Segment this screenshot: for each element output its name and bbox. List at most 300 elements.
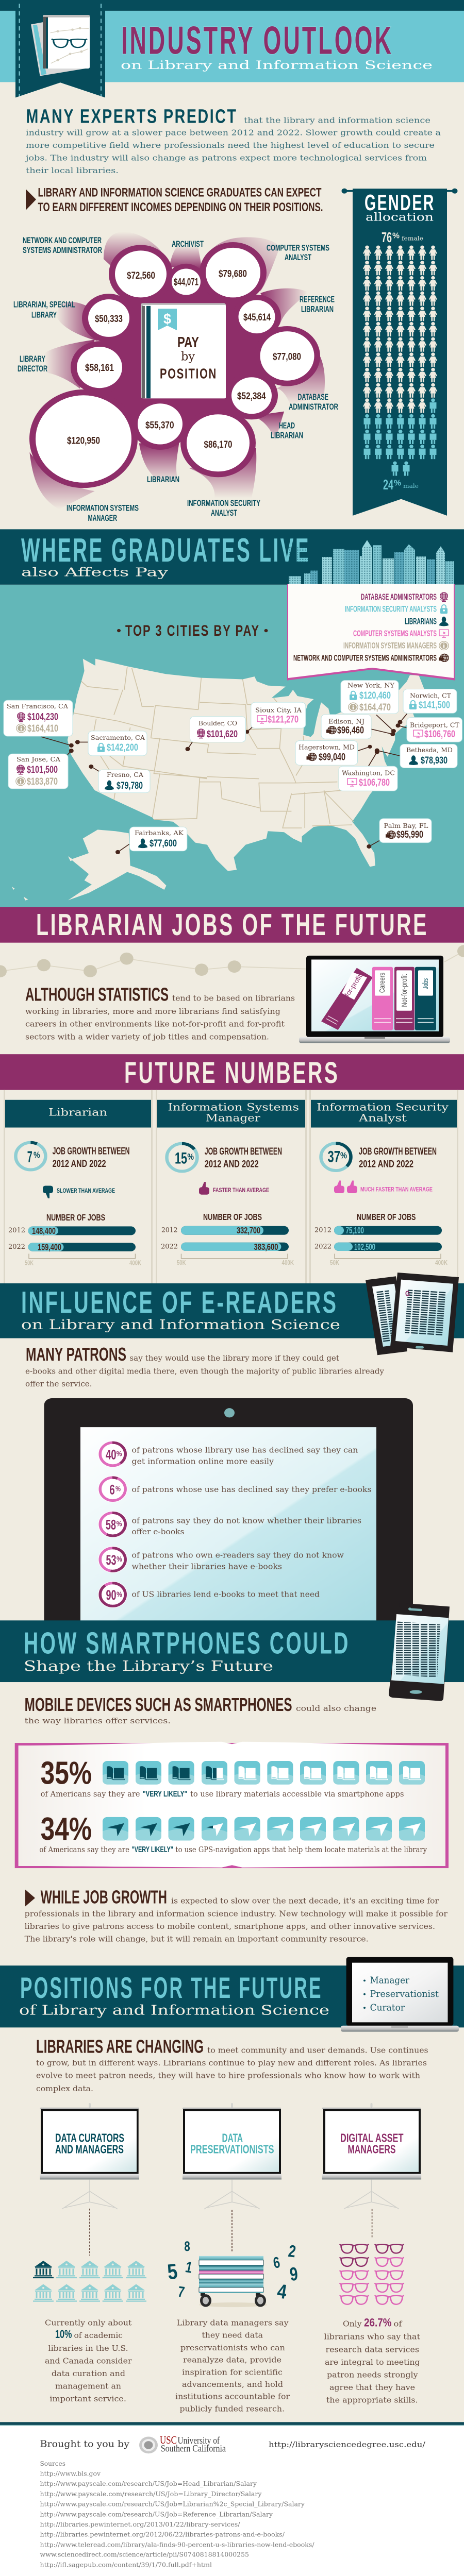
column: Information Systems Manager bbox=[157, 1100, 305, 1266]
icon: book cart with numbers: 1 bbox=[184, 2258, 194, 2276]
24 percent male: male bbox=[403, 483, 419, 489]
text: data preservationists: they need data bbox=[202, 2331, 263, 2340]
many patrons paragraph: MANY PATRONS bbox=[26, 1344, 126, 1365]
callout: Bethesda bbox=[400, 744, 457, 768]
salary circles: $44,071 bbox=[174, 277, 198, 287]
bar chart: systems manager jobs: 2022 bbox=[161, 1243, 178, 1250]
callout: San Jose: San Jose, CA bbox=[16, 756, 61, 764]
text: digital asset managers bbox=[324, 2316, 421, 2404]
position labels: COMPUTER SYSTEMS bbox=[267, 243, 329, 252]
position labels: ADMINISTRATOR bbox=[289, 402, 338, 412]
text: data curators: important service. bbox=[49, 2395, 126, 2403]
text: data preservationists: institutions accountable for bbox=[175, 2392, 290, 2401]
76 percent female: female bbox=[402, 235, 423, 242]
column: Information Systems Manager: FASTER THAN AVERAGE bbox=[213, 1187, 269, 1194]
salary circles: $58,161 bbox=[85, 363, 114, 374]
text: data curators: and Canada consider bbox=[45, 2357, 132, 2365]
stat: 58 percent bbox=[98, 1511, 361, 1538]
top 3 cities heading bbox=[117, 621, 268, 639]
salary circles: $79,680 bbox=[219, 268, 247, 279]
arrow and pay heading: LIBRARY AND INFORMATION SCIENCE GRADUATES CAN EXPECT bbox=[38, 186, 322, 199]
24 percent male bbox=[383, 477, 419, 493]
stat: 53 percent: 53 bbox=[106, 1552, 116, 1568]
stat: 40 percent: of patrons whose library use has declined say they can bbox=[132, 1446, 358, 1454]
position labels: LIBRARIAN bbox=[147, 474, 179, 484]
icon: book cart with numbers: 9 bbox=[289, 2263, 299, 2285]
future numbers banner bbox=[0, 1054, 464, 1090]
callout: San Francisco: $104,230 bbox=[27, 712, 58, 722]
leader lines and city dots bbox=[41, 714, 407, 854]
stat: 35 percent smartphone apps: 35% bbox=[41, 1755, 92, 1791]
sources list: http://www.payscale.com/research/US/Job=Reference_Librarian/Salary bbox=[40, 2511, 273, 2518]
position labels: LIBRARIAN, SPECIAL bbox=[13, 299, 75, 309]
callout: Fresno bbox=[98, 770, 150, 793]
positions for the future banner: of Library and Information Science bbox=[19, 2003, 329, 2018]
intro paragraph: their local libraries. bbox=[26, 166, 119, 175]
callout: Bridgeport: Bridgeport, CT bbox=[410, 722, 459, 729]
callout: San Francisco bbox=[4, 700, 73, 736]
callout: Fairbanks bbox=[129, 827, 187, 851]
position labels: ANALYST bbox=[211, 508, 237, 518]
callout: New York: $164,470 bbox=[359, 702, 391, 713]
stat: 40 percent: 40 bbox=[106, 1447, 117, 1462]
donut: 7 percent bbox=[15, 1143, 45, 1170]
text: data curators: data curation and bbox=[52, 2369, 125, 2378]
intro paragraph: industry will grow at a slower pace between 2012 and 2022. Slower growth could create a bbox=[26, 128, 441, 137]
where graduates live banner: also Affects Pay bbox=[21, 565, 168, 579]
stat: 58 percent: offer e-books bbox=[132, 1528, 185, 1536]
although statistics paragraph: tend to be based on librarians bbox=[172, 994, 295, 1003]
text: digital asset managers: Only bbox=[343, 2319, 362, 2328]
callout: Palm Bay: Palm Bay, FL bbox=[384, 823, 428, 830]
open book statistics panel bbox=[15, 1742, 449, 1868]
bar chart: systems manager jobs: 50K bbox=[177, 1259, 186, 1266]
text: data preservationists: Library data managers say bbox=[177, 2318, 289, 2327]
24 percent male: 24 bbox=[383, 477, 393, 493]
sources list: http://www.bls.gov bbox=[40, 2470, 101, 2478]
pay by position book: $ bbox=[163, 312, 171, 327]
stat: 90 percent: 90 bbox=[106, 1587, 116, 1603]
projector screen: data preservationists: DATA bbox=[222, 2132, 243, 2145]
thumb up bbox=[199, 1182, 209, 1195]
laptop with position list: Curator bbox=[370, 2003, 405, 2013]
donut: 37 percent bbox=[321, 1143, 351, 1171]
city skyline bbox=[289, 540, 454, 585]
header banner bbox=[0, 0, 464, 97]
laptop with binders bbox=[299, 956, 450, 1043]
callout: Palm Bay bbox=[379, 819, 432, 843]
column: Information Systems Manager: NUMBER OF JOBS bbox=[203, 1212, 262, 1222]
legend panel bbox=[287, 584, 455, 681]
city callouts bbox=[4, 681, 462, 851]
stat: 90 percent: of US libraries lend e-books to meet that need bbox=[132, 1590, 320, 1599]
many patrons paragraph: offer the service. bbox=[25, 1380, 92, 1388]
donut: 15 percent bbox=[167, 1144, 197, 1171]
text: digital asset managers: patron needs strongly bbox=[327, 2370, 418, 2379]
bar chart: security analyst jobs: 400K bbox=[435, 1259, 448, 1266]
pay by position book bbox=[141, 303, 226, 398]
position labels: NETWORK AND COMPUTER bbox=[23, 235, 102, 245]
donut: 7 percent: % bbox=[34, 1150, 40, 1160]
e-reader tablets icon: G bbox=[405, 1290, 410, 1298]
position labels: HEAD bbox=[279, 420, 295, 430]
bar chart: systems manager jobs bbox=[161, 1226, 294, 1266]
brought to you by: http://librarysciencedegree.usc.edu/ bbox=[269, 2441, 425, 2449]
bar chart: librarian jobs: 159,400 bbox=[38, 1242, 61, 1252]
callout: Hagerstown: $99,040 bbox=[319, 752, 345, 762]
intro paragraph bbox=[25, 105, 441, 175]
stat: 58 percent: of patrons say they do not know whether their libraries bbox=[132, 1516, 361, 1526]
stat: 34 percent GPS apps bbox=[40, 1817, 427, 1854]
bar chart: security analyst jobs: 2012 bbox=[314, 1227, 332, 1234]
salary circles: $55,370 bbox=[145, 420, 174, 431]
libraries are changing paragraph: to meet community and user demands. Use continues bbox=[207, 2046, 428, 2055]
salary circles: $52,384 bbox=[237, 391, 266, 402]
callout: Fresno: $79,780 bbox=[117, 781, 143, 791]
many patrons paragraph: e-books and other digital media there, even though the majority of public libraries already bbox=[25, 1367, 384, 1376]
projector screen: data preservationists: PRESERVATIONISTS bbox=[190, 2143, 274, 2156]
callout: Edison: Edison, NJ bbox=[328, 718, 364, 725]
text: data curators: 10% bbox=[55, 2328, 72, 2341]
libraries are changing paragraph: to grow, but in different ways. Librarians continue to play new and different roles. As libraries bbox=[36, 2059, 427, 2067]
callout: San Francisco: $164,410 bbox=[27, 723, 58, 734]
projector screen: digital asset managers: MANAGERS bbox=[347, 2143, 396, 2156]
24 percent male: % bbox=[394, 479, 402, 487]
donut: 7 percent: 7 bbox=[27, 1148, 32, 1166]
libraries are changing paragraph: complex data. bbox=[36, 2084, 93, 2093]
callout: Hagerstown: Hagerstown, MD bbox=[299, 744, 355, 751]
column: Information Systems Manager: Manager bbox=[206, 1112, 260, 1124]
while job growth paragraph: WHILE JOB GROWTH bbox=[41, 1887, 167, 1908]
binder: careers: Careers bbox=[378, 973, 387, 993]
smartphones banner: Shape the Library’s Future bbox=[24, 1657, 273, 1674]
donut: 37 percent: 37 bbox=[328, 1148, 340, 1166]
bar chart: systems manager jobs: 400K bbox=[281, 1259, 294, 1266]
intro paragraph: more competitive field where professionals need the highest level of education to secure bbox=[26, 141, 435, 150]
sources list bbox=[40, 2460, 314, 2568]
text: data preservationists: inspiration for scientific bbox=[182, 2368, 283, 2377]
position labels: INFORMATION SECURITY bbox=[187, 498, 260, 508]
many patrons paragraph: say they would use the library more if they could get bbox=[129, 1354, 340, 1363]
icon: book cart with numbers: 2 bbox=[287, 2242, 297, 2261]
column: Information Security Analyst bbox=[311, 1100, 457, 1266]
although statistics paragraph: sectors with a wider variety of job titles and compensation. bbox=[25, 1032, 269, 1041]
column: Information Systems Manager: 2012 AND 2022 bbox=[205, 1159, 259, 1170]
callout: Fairbanks: $77,600 bbox=[150, 838, 177, 849]
icon: book cart with numbers bbox=[166, 2239, 299, 2307]
salary circles: $86,170 bbox=[204, 439, 233, 450]
stat: 34 percent GPS apps: "VERY LIKELY" bbox=[132, 1845, 173, 1854]
position labels: INFORMATION SYSTEMS bbox=[67, 503, 139, 513]
brought to you by: University of bbox=[177, 2435, 220, 2446]
binder: for-profit: for-profit bbox=[343, 973, 364, 998]
influence of e-readers banner bbox=[0, 1283, 464, 1338]
while job growth paragraph bbox=[25, 1887, 448, 1943]
icon: book cart with numbers: 7 bbox=[177, 2283, 186, 2301]
stat: 58 percent: % bbox=[117, 1520, 122, 1528]
where graduates live banner bbox=[0, 529, 464, 585]
icon: glasses grid bbox=[339, 2244, 404, 2304]
projector screen: data curators: AND MANAGERS bbox=[55, 2143, 124, 2156]
text: digital asset managers: of bbox=[394, 2319, 403, 2328]
sources list: http://libraries.pewinternet.org/2012/06/22/libraries-patrons-and-e-books/ bbox=[40, 2531, 285, 2538]
subtitle: on Library and Information Science bbox=[121, 58, 433, 72]
column: Information Security Analyst: Information Security bbox=[317, 1101, 449, 1113]
brought to you by: Brought to you by bbox=[40, 2439, 130, 2449]
column: Information Systems Manager: Information Systems bbox=[168, 1101, 299, 1113]
smartphone icon bbox=[389, 1603, 450, 1701]
icon: academic library buildings bbox=[33, 2261, 146, 2302]
pay by position chart bbox=[13, 232, 338, 523]
legend panel: LIBRARIANS bbox=[405, 616, 437, 626]
callout: Palm Bay: $95,990 bbox=[396, 829, 423, 840]
stat: 34 percent GPS apps: 34% bbox=[41, 1811, 92, 1846]
projector screen: data curators: DATA CURATORS bbox=[55, 2132, 124, 2145]
callout: Norwich: Norwich, CT bbox=[410, 692, 451, 700]
column: Information Security Analyst: MUCH FASTER THAN AVERAGE bbox=[360, 1186, 433, 1193]
stat: 6 percent bbox=[98, 1476, 372, 1502]
stat: 53 percent: whether their libraries have e-books bbox=[132, 1562, 282, 1571]
column: Information Security Analyst: 2012 AND 2022 bbox=[359, 1159, 413, 1170]
binder: jobs bbox=[415, 967, 436, 1030]
arrow and pay heading bbox=[26, 186, 323, 214]
bar chart: librarian jobs: 50K bbox=[25, 1259, 34, 1266]
icon: book cart with numbers: 5 bbox=[166, 2260, 179, 2284]
callout: New York: $120,460 bbox=[359, 690, 391, 701]
pay by position book: PAY bbox=[177, 334, 199, 351]
callout: Sacramento: Sacramento, CA bbox=[91, 735, 145, 742]
text: data curators: Currently only about bbox=[45, 2318, 132, 2327]
bar chart: librarian jobs bbox=[8, 1226, 141, 1266]
callout: Boulder: Boulder, CO bbox=[198, 720, 237, 727]
pay by position book: POSITION bbox=[160, 366, 217, 382]
trend line decoration bbox=[0, 945, 464, 977]
laptop with position list: Manager bbox=[370, 1975, 409, 1986]
arrow and pay heading: TO EARN DIFFERENT INCOMES DEPENDING ON THEIR POSITIONS. bbox=[38, 200, 323, 214]
stat: 6 percent: of patrons whose use has declined say they prefer e-books bbox=[132, 1485, 372, 1494]
salary circles: $77,080 bbox=[273, 351, 301, 362]
intro paragraph: MANY EXPERTS PREDICT bbox=[26, 105, 237, 127]
76 percent female: 76 bbox=[382, 230, 392, 246]
intro paragraph: that the library and information science bbox=[244, 116, 430, 125]
position labels: LIBRARIAN bbox=[301, 304, 334, 314]
dashed connector lines bbox=[90, 2209, 372, 2256]
fading tails bbox=[29, 232, 325, 509]
column: Librarian: 2012 AND 2022 bbox=[53, 1159, 106, 1170]
position labels: SYSTEMS ADMINISTRATOR bbox=[23, 245, 102, 255]
stat: 58 percent: 58 bbox=[106, 1517, 116, 1532]
thumb down bbox=[43, 1185, 53, 1198]
sources list: Sources bbox=[40, 2460, 65, 2467]
libraries are changing paragraph bbox=[36, 2036, 428, 2093]
libraries are changing paragraph: LIBRARIES ARE CHANGING bbox=[36, 2036, 204, 2057]
top 3 cities heading: TOP 3 CITIES BY PAY bbox=[125, 621, 260, 639]
text: data curators bbox=[45, 2318, 132, 2403]
callout: Bridgeport bbox=[407, 718, 462, 742]
bar chart: security analyst jobs: 50K bbox=[330, 1259, 339, 1266]
callout: Fresno: Fresno, CA bbox=[107, 772, 144, 779]
text: digital asset managers: are integral to meeting bbox=[325, 2358, 420, 2367]
text: data preservationists: preservationists who can bbox=[180, 2344, 285, 2352]
text: digital asset managers: 26.7% bbox=[364, 2316, 392, 2329]
binder: careers bbox=[372, 967, 393, 1030]
76 percent female: % bbox=[392, 231, 400, 240]
76 percent female bbox=[382, 230, 423, 246]
stat: 6 percent: 6 bbox=[109, 1482, 115, 1497]
callout: Washington bbox=[339, 766, 397, 791]
map background bbox=[0, 585, 464, 907]
binder: for-profit bbox=[321, 968, 373, 1030]
column: Librarian: SLOWER THAN AVERAGE bbox=[57, 1188, 115, 1194]
callout: New York bbox=[341, 681, 399, 714]
column: Information Security Analyst: Analyst bbox=[358, 1112, 407, 1124]
callout: Norwich bbox=[403, 689, 457, 713]
projector screen: data preservationists bbox=[183, 2103, 281, 2209]
two thumbs up bbox=[334, 1180, 357, 1193]
bar chart: systems manager jobs: 2012 bbox=[161, 1227, 177, 1234]
callout: Sioux City bbox=[251, 702, 306, 728]
callout: Bethesda: $78,930 bbox=[421, 755, 448, 766]
positions for the future banner bbox=[0, 1965, 464, 2027]
bar chart: librarian jobs: 148,400 bbox=[32, 1226, 56, 1236]
column: Librarian: Librarian bbox=[48, 1107, 107, 1118]
libraries are changing paragraph: evolve to meet patron needs, they will have to hire professionals who know how to work with bbox=[36, 2071, 420, 2080]
column: Librarian bbox=[5, 1100, 151, 1266]
intro paragraph: jobs. The industry will also change as patrons expect more technological services from bbox=[25, 154, 427, 162]
although statistics paragraph: careers in other environments like not-for-profit and for-profit bbox=[25, 1020, 285, 1029]
mobile devices paragraph: MOBILE DEVICES SUCH AS SMARTPHONES bbox=[25, 1694, 292, 1716]
while job growth paragraph: libraries to give patrons access to mobile content, smartphone apps, and other innovative services. bbox=[25, 1922, 435, 1931]
although statistics paragraph: ALTHOUGH STATISTICS bbox=[25, 984, 169, 1005]
position labels: REFERENCE bbox=[300, 294, 335, 304]
position labels: ARCHIVIST bbox=[172, 239, 204, 249]
mobile devices paragraph: the way libraries offer services. bbox=[25, 1717, 171, 1725]
bar chart: security analyst jobs: 102,500 bbox=[354, 1242, 375, 1252]
stat: 90 percent bbox=[98, 1581, 320, 1608]
stat: 90 percent: % bbox=[117, 1590, 122, 1599]
salary circles: $45,614 bbox=[243, 312, 271, 323]
stat: 35 percent smartphone apps bbox=[41, 1761, 425, 1798]
laptop with position list bbox=[341, 1957, 459, 2032]
stat: 34 percent GPS apps: of Americans say they are bbox=[39, 1845, 129, 1854]
brought to you by bbox=[40, 2434, 425, 2454]
position labels: DIRECTOR bbox=[18, 364, 47, 374]
callout: Washington: Washington, DC bbox=[342, 770, 395, 777]
sources list: http://www.payscale.com/research/US/Job=Librarian%2c_Special_Library/Salary bbox=[40, 2500, 305, 2507]
text: digital asset managers: librarians who say that bbox=[324, 2332, 421, 2342]
callout: San Jose: $183,870 bbox=[27, 776, 58, 787]
text: data curators: of academic bbox=[74, 2331, 123, 2340]
stat: 53 percent: % bbox=[117, 1555, 122, 1564]
stat: 40 percent: get information online more easily bbox=[132, 1457, 274, 1466]
binder: not-for-profit: Not-for-profit bbox=[400, 974, 409, 1007]
many patrons paragraph bbox=[25, 1344, 384, 1388]
salary circles: $50,333 bbox=[95, 314, 123, 325]
column: Librarian: JOB GROWTH BETWEEN bbox=[53, 1146, 130, 1157]
text: digital asset managers: agree that they have bbox=[329, 2383, 415, 2392]
ribbon with book icon bbox=[15, 0, 105, 97]
bar chart: security analyst jobs: 2022 bbox=[314, 1243, 332, 1250]
callout: Edison: $96,460 bbox=[337, 725, 364, 736]
callout: Sacramento bbox=[88, 731, 147, 756]
donut: 15 percent: % bbox=[187, 1152, 194, 1162]
binder: not-for-profit bbox=[394, 967, 415, 1030]
smartphones banner bbox=[0, 1620, 464, 1682]
sources list: http://www.teleread.com/library/ala-finds-90-percent-u-s-libraries-now-lend-ebooks/ bbox=[40, 2541, 314, 2548]
mobile devices paragraph: could also change bbox=[296, 1704, 376, 1713]
bar chart: security analyst jobs: 75,100 bbox=[345, 1226, 364, 1235]
salary circles: $120,950 bbox=[67, 435, 100, 446]
USC seal bbox=[139, 2437, 158, 2453]
e-reader tablets icon bbox=[366, 1273, 459, 1355]
gender allocation panel: allocation bbox=[366, 211, 434, 224]
bar chart: systems manager jobs: 383,600 bbox=[254, 1242, 278, 1252]
text: digital asset managers: the appropriate skills. bbox=[326, 2396, 418, 2404]
position labels bbox=[13, 235, 338, 523]
callout: Boulder: $101,620 bbox=[207, 729, 238, 740]
bar chart: librarian jobs: 2012 bbox=[8, 1227, 25, 1234]
purple blob bbox=[29, 242, 320, 488]
callout: Sacramento: $142,200 bbox=[107, 742, 138, 753]
callout: San Jose: $101,500 bbox=[27, 765, 58, 775]
salary circles: $72,560 bbox=[127, 270, 155, 281]
projector screen: digital asset managers: DIGITAL ASSET bbox=[340, 2132, 404, 2145]
callout: San Jose bbox=[8, 754, 68, 789]
salary circles bbox=[36, 248, 314, 483]
position labels: LIBRARY bbox=[20, 354, 45, 364]
column: Information Systems Manager: JOB GROWTH BETWEEN bbox=[205, 1146, 282, 1157]
text: data preservationists bbox=[175, 2318, 290, 2413]
brought to you by: Southern California bbox=[161, 2443, 226, 2454]
stat: 53 percent bbox=[98, 1546, 344, 1573]
footer divider bbox=[0, 2422, 464, 2576]
position labels: MANAGER bbox=[88, 513, 117, 523]
text: digital asset managers: research data services bbox=[326, 2345, 419, 2354]
callout: New York: New York, NY bbox=[347, 682, 394, 690]
callout: Edison bbox=[321, 715, 371, 739]
binder: jobs: Jobs bbox=[421, 978, 430, 989]
gender allocation panel bbox=[341, 189, 458, 516]
projector screen: data curators bbox=[40, 2103, 139, 2209]
position labels: LIBRARY bbox=[31, 310, 57, 319]
callout: Sioux City: Sioux City, IA bbox=[255, 707, 302, 714]
column: Information Security Analyst: NUMBER OF JOBS bbox=[357, 1212, 416, 1222]
callout: Sioux City: $121,270 bbox=[268, 714, 299, 725]
sources list: http://ifl.sagepub.com/content/39/1/70.full.pdf+html bbox=[40, 2561, 212, 2568]
stat: 40 percent bbox=[98, 1440, 358, 1467]
text: data preservationists: publicly funded research. bbox=[179, 2404, 285, 2413]
donut: 37 percent: % bbox=[340, 1150, 347, 1160]
sources list: http://www.payscale.com/research/US/Job=Head_Librarian/Salary bbox=[40, 2480, 257, 2487]
text: data preservationists: reanalyze data, provide bbox=[183, 2355, 281, 2364]
stat: 53 percent: of patrons who own e-readers say they do not know bbox=[132, 1551, 344, 1560]
stat: 35 percent smartphone apps: to use library materials accessible via smartphone apps bbox=[190, 1790, 404, 1799]
people pictogram bbox=[363, 246, 437, 476]
map of the United States bbox=[12, 659, 426, 901]
stat: 35 percent smartphone apps: "VERY LIKELY" bbox=[143, 1789, 187, 1799]
although statistics paragraph bbox=[25, 984, 295, 1041]
stat: 35 percent smartphone apps: of Americans say they are bbox=[41, 1790, 140, 1799]
mobile devices paragraph bbox=[25, 1694, 376, 1725]
text: data preservationists: advancements, and hold bbox=[182, 2380, 283, 2389]
pay by position book: by bbox=[181, 349, 195, 363]
stat: 6 percent: % bbox=[115, 1485, 121, 1493]
position labels: LIBRARIAN bbox=[271, 430, 303, 440]
sources list: http://www.payscale.com/research/US/Job=Library_Director/Salary bbox=[40, 2490, 262, 2498]
projector screen: digital asset managers bbox=[322, 2103, 421, 2209]
callout: Bethesda: Bethesda, MD bbox=[406, 747, 453, 754]
icon: book cart with numbers: 6 bbox=[272, 2253, 281, 2272]
